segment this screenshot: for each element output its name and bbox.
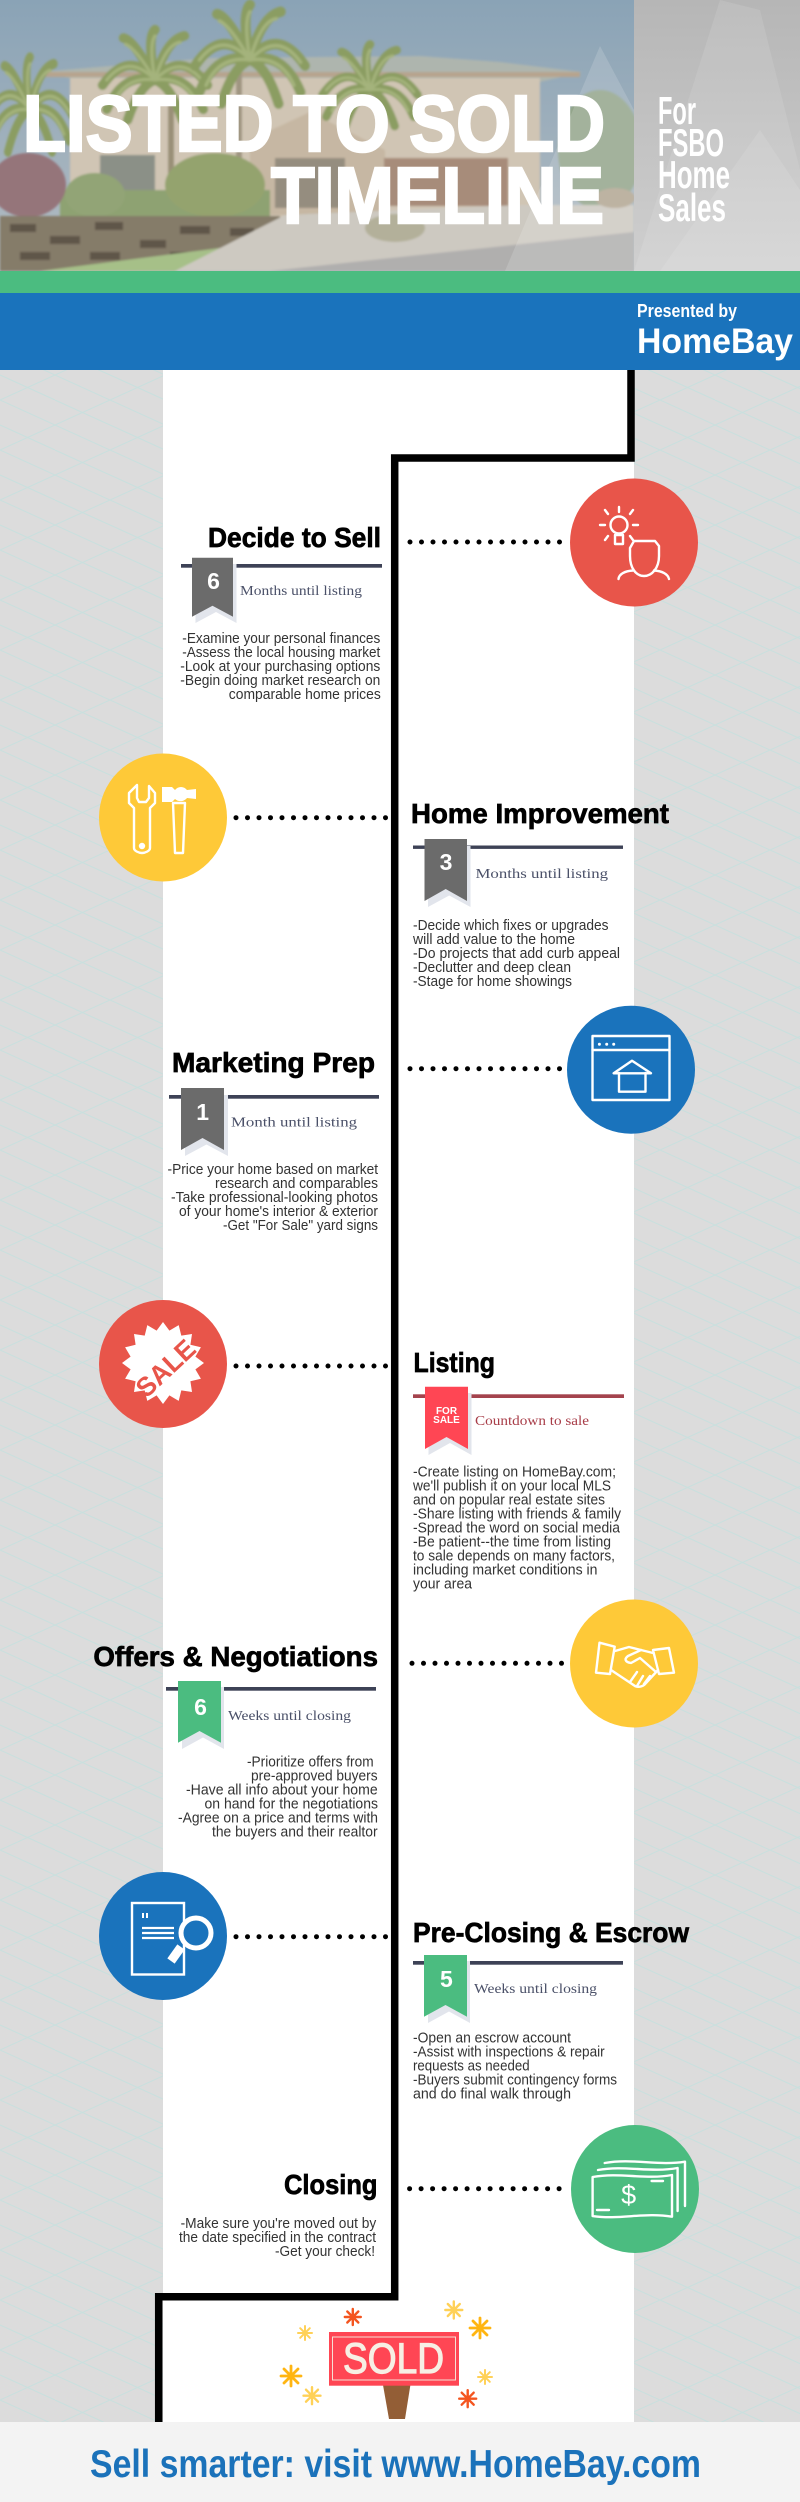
body text: -Examine your personal finances xyxy=(182,631,380,647)
body text: comparable home prices xyxy=(229,687,381,703)
countdown label: Month until listing xyxy=(231,1116,357,1131)
body text: research and comparables xyxy=(215,1176,378,1192)
body text: -Take professional-looking photos xyxy=(171,1190,378,1206)
body text: -Look at your purchasing options xyxy=(180,659,380,675)
rule and ribbon xyxy=(181,558,382,623)
icon: document and magnifying glass xyxy=(99,1872,227,2000)
title: LISTED TO SOLD xyxy=(23,79,605,168)
heading: Pre-Closing & Escrow xyxy=(413,1917,689,1948)
connector dots xyxy=(410,2186,560,2191)
heading: Listing xyxy=(414,1347,495,1378)
icon: web page with house xyxy=(567,1006,695,1134)
body text xyxy=(412,918,620,990)
body text: the date specified in the contract xyxy=(179,2230,376,2246)
body text: your area xyxy=(413,1577,473,1593)
rule and ribbon xyxy=(166,1681,376,1749)
step 6: Pre-Closing & Escrow xyxy=(99,1872,689,2103)
title xyxy=(23,79,605,240)
heading: Offers & Negotiations xyxy=(93,1641,378,1672)
step 1: Decide to Sell xyxy=(180,478,698,703)
icon: sale starburst: SALE xyxy=(130,1334,202,1403)
body text: -Buyers submit contingency forms xyxy=(413,2073,617,2089)
subtitle: For FSBO Home Sales: For xyxy=(658,90,696,133)
body text: will add value to the home xyxy=(412,932,575,948)
body text: -Agree on a price and terms with xyxy=(178,1811,378,1827)
rule and ribbon: FOR xyxy=(436,1406,458,1417)
countdown label: Months until listing xyxy=(240,584,362,599)
footer call to action xyxy=(0,2422,800,2502)
body text: the buyers and their realtor xyxy=(212,1825,378,1841)
body text: -Have all info about your home xyxy=(186,1783,378,1799)
countdown label: Weeks until closing xyxy=(474,1982,597,1997)
countdown label: Months until listing xyxy=(476,867,608,882)
body text: -Prioritize offers from xyxy=(247,1755,374,1771)
sign post xyxy=(383,2385,410,2419)
blue band with presenter logo: Presented by xyxy=(637,301,737,321)
body text: -Be patient--the time from listing xyxy=(413,1535,611,1551)
connector dots xyxy=(410,1066,560,1071)
body text: we'll publish it on your local MLS xyxy=(412,1479,611,1495)
body text: on hand for the negotiations xyxy=(204,1797,378,1813)
body text: -Declutter and deep clean xyxy=(413,960,571,976)
body text: and on popular real estate sites xyxy=(413,1493,605,1509)
footer call to action: Sell smarter: visit www.HomeBay.com xyxy=(90,2443,701,2486)
timeline path xyxy=(159,370,631,2422)
body text: -Create listing on HomeBay.com; xyxy=(413,1465,616,1481)
icon: stack of cash xyxy=(571,2125,699,2253)
connector dots xyxy=(412,1661,562,1666)
heading: Home Improvement xyxy=(411,798,669,829)
body text xyxy=(180,631,381,703)
blue band with presenter logo: HomeBay xyxy=(637,322,794,361)
body text: -Get your check! xyxy=(275,2244,375,2260)
sold sign with sparkles xyxy=(281,2302,492,2419)
body text: -Do projects that add curb appeal xyxy=(413,946,620,962)
blue band with presenter logo xyxy=(0,293,800,370)
connector dots xyxy=(236,1364,386,1368)
sign board: SOLD xyxy=(343,2335,444,2383)
body text: -Assess the local housing market xyxy=(182,645,380,661)
rule and ribbon: 5 xyxy=(440,1966,453,1992)
body text: -Share listing with friends & family xyxy=(413,1507,622,1523)
rule and ribbon xyxy=(169,1088,379,1156)
header photo: house with palm trees xyxy=(0,0,642,271)
title: TIMELINE xyxy=(271,151,604,240)
step 7: Closing xyxy=(179,2125,699,2260)
subtitle: For FSBO Home Sales: Sales xyxy=(658,187,726,230)
body text xyxy=(412,1465,622,1593)
body text: -Make sure you're moved out by xyxy=(181,2216,377,2232)
body text: -Begin doing market research on xyxy=(180,673,380,689)
body text xyxy=(168,1162,378,1234)
icon: idea and person xyxy=(570,478,698,606)
body text: -Stage for home showings xyxy=(413,974,572,990)
step 2: Home Improvement xyxy=(99,754,669,990)
body text: -Price your home based on market xyxy=(168,1162,378,1178)
body text: and do final walk through xyxy=(413,2087,571,2103)
step 5: Offers & Negotiations xyxy=(93,1600,698,1841)
subtitle: For FSBO Home Sales: FSBO xyxy=(658,122,724,165)
body text xyxy=(179,2216,377,2260)
body text: -Decide which fixes or upgrades xyxy=(413,918,608,934)
sparkles xyxy=(281,2302,492,2407)
body text xyxy=(178,1755,378,1841)
rule and ribbon: 6 xyxy=(194,1694,207,1720)
rule and ribbon: 3 xyxy=(440,849,452,875)
icon: sale starburst xyxy=(99,1300,227,1428)
step 4: Listing xyxy=(99,1300,624,1593)
body text: -Get "For Sale" yard signs xyxy=(223,1218,378,1234)
body text: pre-approved buyers xyxy=(251,1769,378,1785)
green band xyxy=(0,271,800,293)
countdown label: Countdown to sale xyxy=(475,1414,589,1429)
icon: handshake xyxy=(570,1600,698,1728)
rule and ribbon: 6 xyxy=(207,568,220,594)
countdown label: Weeks until closing xyxy=(228,1709,351,1724)
subtitle: For FSBO Home Sales xyxy=(658,90,730,230)
heading: Closing xyxy=(284,2169,378,2200)
body text: -Assist with inspections & repair xyxy=(413,2045,605,2061)
body text: -Spread the word on social media xyxy=(413,1521,621,1537)
icon: stack of cash: $ xyxy=(621,2180,636,2210)
header side panel xyxy=(634,0,800,271)
subtitle: For FSBO Home Sales: Home xyxy=(658,154,730,197)
body text: of your home's interior & exterior xyxy=(179,1204,378,1220)
body text: requests as needed xyxy=(413,2059,530,2075)
body text xyxy=(413,2031,617,2103)
rule and ribbon xyxy=(413,1387,624,1455)
connector dots xyxy=(410,540,560,544)
rule and ribbon xyxy=(413,1955,623,2023)
connector dots xyxy=(236,1934,386,1939)
rule and ribbon: 1 xyxy=(196,1099,209,1125)
heading: Marketing Prep xyxy=(172,1047,375,1078)
step 3: Marketing Prep xyxy=(168,1006,695,1234)
body text: including market conditions in xyxy=(413,1563,598,1579)
heading: Decide to Sell xyxy=(208,522,381,553)
rule and ribbon: SALE xyxy=(433,1415,460,1426)
body text: to sale depends on many factors, xyxy=(413,1549,615,1565)
body text: -Open an escrow account xyxy=(413,2031,571,2047)
rule and ribbon xyxy=(413,839,623,907)
connector dots xyxy=(236,815,386,820)
icon: wrench and hammer xyxy=(99,754,227,882)
